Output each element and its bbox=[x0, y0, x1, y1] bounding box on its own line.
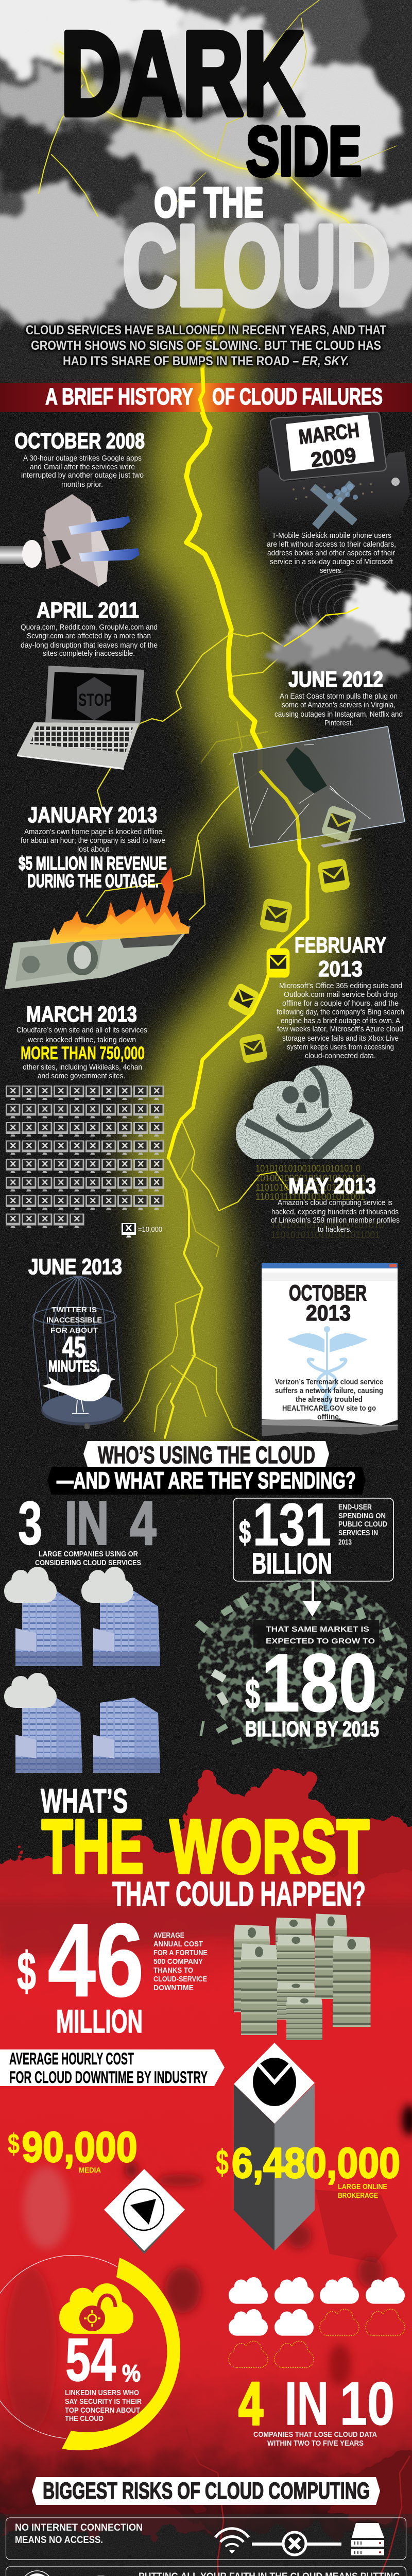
SIDE: SIDE bbox=[246, 112, 362, 190]
number: $ bbox=[239, 1515, 251, 1550]
stat: $90,000 media: $ bbox=[8, 2128, 20, 2160]
icon: unplugged plug bbox=[0, 494, 140, 587]
icon: cracked tablet bbox=[233, 726, 405, 848]
icon: cloud with open lock bbox=[59, 2283, 133, 2334]
caption box bbox=[253, 1620, 379, 1648]
money swirl bbox=[195, 1579, 409, 1749]
number: IN bbox=[65, 1489, 109, 1557]
description: T-Mobile Sidekick mobile phone users bbox=[272, 531, 391, 540]
caption: COMPANIES THAT LOSE CLOUD DATA bbox=[253, 2430, 377, 2439]
date: JUNE 2012 bbox=[288, 667, 383, 692]
intro paragraph: HAD ITS SHARE OF BUMPS IN THE ROAD – ER, SKY. bbox=[63, 354, 349, 368]
heading: what's the worst that could happen bbox=[41, 1782, 369, 1913]
date: JANUARY 2013 bbox=[28, 803, 157, 827]
label on phone screen bbox=[286, 415, 374, 473]
stat: 4 in 10 bbox=[238, 2370, 394, 2448]
description: for about an hour; the company is said to have bbox=[21, 836, 165, 845]
description continued: and some government sites. bbox=[38, 1072, 125, 1080]
main lightning bolt bbox=[165, 310, 308, 1438]
dark lower backdrop bbox=[0, 2514, 412, 2576]
description: address books and other aspects of their bbox=[267, 549, 395, 557]
description bbox=[277, 981, 404, 1060]
cage text bbox=[46, 1306, 102, 1375]
date: OCTOBER 2008 bbox=[14, 429, 145, 453]
storm sky photo bbox=[0, 0, 412, 402]
timeline: October 2013 browser bbox=[262, 1263, 398, 1436]
stat: $6,480,000 large online brokerage: LARGE ONLINE bbox=[338, 2182, 387, 2191]
number: $ bbox=[245, 1671, 260, 1718]
date: 2013 bbox=[306, 1301, 351, 1326]
heading: who's using the cloud bbox=[47, 1441, 366, 1495]
icon: bird bbox=[42, 1374, 115, 1414]
caption: TOP CONCERN ABOUT bbox=[65, 2406, 140, 2415]
yellow arc bbox=[62, 2258, 180, 2450]
pictogram: 4 in 10 clouds bbox=[229, 2277, 405, 2368]
date: JUNE 2013 bbox=[28, 1255, 122, 1279]
description: and Gmail after the services were bbox=[30, 463, 135, 471]
red stain shading bbox=[0, 1901, 412, 2432]
description bbox=[16, 1026, 147, 1044]
description: Amazon’s own home page is knocked offline bbox=[24, 827, 162, 836]
description: Microsoft’s Office 365 editing suite and bbox=[279, 981, 402, 990]
percentage: % bbox=[122, 2360, 141, 2386]
number: BILLION bbox=[252, 1547, 332, 1580]
description: Outlook.com mail service both drop bbox=[284, 990, 398, 999]
description: to hackers. bbox=[318, 1225, 352, 1234]
caption bbox=[65, 2388, 142, 2423]
description continued: other sites, including Wikileaks, 4chan bbox=[23, 1063, 142, 1072]
description continued bbox=[23, 1063, 142, 1080]
red stain background bbox=[0, 1767, 412, 2535]
risk 2: cost bbox=[6, 2567, 406, 2576]
timeline: June 2013 bbox=[28, 1255, 124, 1429]
caption bbox=[253, 2430, 377, 2448]
description: causing outages in Instagram, Netflix and bbox=[274, 710, 403, 719]
intro paragraph bbox=[26, 323, 386, 368]
stat: 4 in 10: IN bbox=[285, 2370, 329, 2438]
percentage: 54 bbox=[65, 2326, 116, 2394]
legend: one monitor equals 10,000 bbox=[122, 1223, 162, 1238]
description: cloud-connected data. bbox=[305, 1052, 376, 1060]
text: NO INTERNET CONNECTION bbox=[15, 2522, 143, 2533]
binary digits: 1101010010100100101010 bbox=[271, 1220, 384, 1230]
description: interrupted by another outage just two bbox=[21, 471, 144, 480]
timeline: envelope icons along bolt bbox=[227, 805, 357, 1064]
stat: $6,480,000 large online brokerage: BROKERAGE bbox=[338, 2191, 378, 2200]
number: 3 bbox=[18, 1489, 42, 1557]
binary digits: 11010111110101001011001 bbox=[255, 1192, 365, 1202]
description: the already troubled bbox=[296, 1395, 363, 1404]
icon: laptop with stop sign bbox=[17, 666, 144, 770]
caption: ANNUAL COST bbox=[153, 1940, 203, 1948]
icon: caduceus bbox=[288, 1326, 367, 1411]
caption: THE CLOUD bbox=[65, 2414, 104, 2423]
revenue callout bbox=[19, 853, 167, 891]
description bbox=[267, 531, 396, 575]
description: lost about bbox=[77, 845, 110, 854]
icon: stacks of money bbox=[234, 1913, 371, 2040]
top lightning bolts bbox=[39, 0, 397, 252]
binary digits: 1101010110101001011001 bbox=[271, 1230, 380, 1240]
lightning branches bbox=[87, 607, 358, 1442]
number: 4 bbox=[130, 1489, 156, 1557]
caption: DOWNTIME bbox=[153, 1984, 194, 1992]
description bbox=[21, 623, 158, 658]
binary digits: 11010101001010101010101 bbox=[255, 1182, 365, 1193]
caption: THANKS TO bbox=[153, 1966, 193, 1975]
description: are left without access to their calendars, bbox=[267, 540, 396, 549]
description: storage service fails and its Xbox Live bbox=[282, 1034, 399, 1043]
caption: SPENDING ON bbox=[338, 1512, 386, 1520]
line one: WHAT’S bbox=[41, 1782, 128, 1820]
timeline: January 2013 bbox=[5, 803, 191, 989]
number bbox=[18, 1489, 156, 1557]
description: some of Amazon’s servers in Virginia, bbox=[282, 701, 396, 709]
caption bbox=[153, 1931, 208, 1992]
description: A 30-hour outage strikes Google apps bbox=[23, 454, 142, 463]
DARK: DARK bbox=[61, 7, 304, 140]
caption: 2013 bbox=[338, 1538, 352, 1547]
caption bbox=[35, 1550, 141, 1567]
stat: 4 in 10: 10 bbox=[340, 2370, 394, 2438]
rounded frame bbox=[233, 1498, 393, 1581]
stat: $180 billion bbox=[245, 1620, 379, 1741]
description bbox=[274, 692, 403, 727]
number bbox=[239, 1491, 332, 1580]
number: 180 bbox=[262, 1636, 377, 1729]
number: MILLION bbox=[56, 2004, 143, 2040]
description: Quora.com, Reddit.com, GroupMe.com and bbox=[21, 623, 158, 632]
description: Verizon’s Terremark cloud service bbox=[275, 1378, 383, 1386]
description: sites completely inaccessible. bbox=[43, 649, 135, 658]
line two: THE bbox=[42, 1804, 144, 1889]
number: 131 bbox=[253, 1491, 331, 1558]
date: MAY 2013 bbox=[288, 1174, 376, 1198]
heading: average hourly cost arrow banner bbox=[0, 2049, 225, 2087]
stat: $46 million bbox=[17, 1902, 371, 2040]
description: An East Coast storm pulls the plug on bbox=[280, 692, 398, 701]
caption box: THAT SAME MARKET IS bbox=[266, 1625, 369, 1634]
OF THE: OF THE bbox=[154, 179, 264, 226]
number: $ bbox=[17, 1941, 36, 2002]
description: few weeks later, Microsoft’s Azure cloud bbox=[277, 1025, 403, 1033]
revenue callout: DURING THE OUTAGE. bbox=[27, 870, 159, 891]
binary digits bbox=[255, 1163, 384, 1240]
date: OCTOBER bbox=[289, 1281, 367, 1306]
description: day-long disruption that leaves many of the bbox=[21, 641, 158, 650]
description bbox=[271, 1198, 400, 1234]
description: Pinterest. bbox=[324, 719, 353, 727]
timeline: March 2013 bbox=[6, 1002, 165, 1238]
timeline: April 2011 bbox=[17, 598, 158, 770]
icon: broken connection bbox=[252, 2532, 341, 2555]
stat: 4 in 10: 4 bbox=[238, 2370, 263, 2438]
text bbox=[15, 2522, 143, 2546]
description: Cloudfare’s own site and all of its services bbox=[16, 1026, 147, 1035]
donut chart: 54 percent bbox=[0, 2256, 180, 2450]
icon: storm cloud and fingerprint bbox=[270, 571, 412, 683]
map pin: media play button bbox=[104, 2169, 185, 2254]
caption: FOR A FORTUNE bbox=[153, 1948, 208, 1957]
white ribbon: WHO’S USING THE CLOUD bbox=[98, 1442, 315, 1468]
line two bbox=[42, 1804, 369, 1889]
description: offline for a couple of hours, and the bbox=[282, 999, 399, 1008]
icon: bird cage bbox=[33, 1276, 124, 1429]
icon: laptop with stop sign: STOP bbox=[78, 690, 112, 710]
cage text: FOR ABOUT bbox=[50, 1326, 98, 1335]
stat: 3 in 4 bbox=[4, 1489, 160, 1773]
title: DARK SIDE OF THE CLOUD bbox=[61, 7, 390, 329]
description: Scvngr.com are affected by a more than bbox=[27, 632, 151, 640]
description: system keeps users from accessing bbox=[287, 1043, 394, 1052]
date bbox=[295, 933, 386, 981]
description: suffers a network failure, causing bbox=[275, 1386, 383, 1395]
caption: CONSIDERING CLOUD SERVICES bbox=[35, 1558, 141, 1567]
number: 46 bbox=[47, 1902, 144, 2019]
caption: WITHIN TWO TO FIVE YEARS bbox=[267, 2439, 364, 2448]
section heading: brief history banner bbox=[0, 368, 412, 412]
description: were knocked offline, taking down bbox=[27, 1036, 136, 1044]
yellow callout: MORE THAN 750,000 bbox=[21, 1043, 145, 1063]
caption: 500 COMPANY bbox=[153, 1957, 203, 1966]
icon: wifi bbox=[215, 2529, 249, 2554]
caption bbox=[338, 1503, 387, 1547]
stat: $131 billion box bbox=[233, 1491, 393, 1581]
thin circle bbox=[0, 2256, 117, 2438]
timeline: February 2013 bbox=[277, 933, 404, 1060]
number bbox=[17, 1902, 144, 2040]
caption: PUBLIC CLOUD bbox=[338, 1520, 387, 1529]
caption: SAY SECURITY IS THEIR bbox=[65, 2397, 142, 2406]
label on phone screen: MARCH bbox=[298, 419, 360, 449]
banner text left: A BRIEF HISTORY bbox=[45, 383, 193, 410]
description bbox=[275, 1378, 383, 1421]
legend: one monitor equals 10,000: =10,000 bbox=[138, 1225, 162, 1234]
timeline: March 2009 bbox=[259, 412, 410, 575]
description: Amazon’s cloud computing service is bbox=[278, 1198, 392, 1207]
number bbox=[245, 1636, 379, 1741]
description: service in a six-day outage of Microsoft bbox=[270, 557, 393, 566]
timeline: October 2008 bbox=[0, 429, 145, 587]
description: hacked, exposing hundreds of thousands bbox=[271, 1208, 399, 1216]
icon: coins bbox=[21, 2571, 137, 2576]
description: HEALTHCARE.GOV site to go bbox=[282, 1404, 376, 1413]
cage text: 45 bbox=[62, 1331, 86, 1364]
date: 2013 bbox=[318, 957, 363, 981]
icon: T-Mobile Sidekick phone bbox=[259, 412, 410, 527]
cage text: MINUTES. bbox=[48, 1357, 100, 1375]
panel bbox=[6, 2518, 406, 2560]
timeline: May 2013 bbox=[236, 1065, 400, 1240]
stat: $6,480,000 large online brokerage bbox=[216, 2139, 400, 2200]
caption: CLOUD-SERVICE bbox=[153, 1975, 207, 1984]
caption: LARGE COMPANIES USING OR bbox=[39, 1550, 138, 1558]
heading: average hourly cost arrow banner: FOR CLOUD DOWNTIME BY INDUSTRY bbox=[9, 2068, 208, 2087]
caption box: EXPECTED TO GROW TO bbox=[266, 1637, 375, 1646]
icon: burning dollar bill bbox=[5, 867, 191, 989]
stat: $6,480,000 large online brokerage: $ bbox=[216, 2143, 229, 2182]
label on phone screen: 2009 bbox=[310, 444, 357, 471]
cage text: INACCESSIBLE bbox=[46, 1316, 102, 1325]
arrow down to next stat bbox=[303, 1581, 321, 1617]
binary digits: 10100100001001010101110 bbox=[255, 1173, 365, 1183]
description bbox=[21, 454, 144, 489]
map pin: large online brokerage clock bbox=[234, 2043, 315, 2251]
date: APRIL 2011 bbox=[37, 598, 139, 623]
description bbox=[21, 827, 165, 854]
description: months prior. bbox=[61, 480, 103, 489]
browser window bbox=[262, 1263, 398, 1436]
pictogram: buildings with clouds bbox=[4, 1567, 160, 1773]
heading: average hourly cost arrow banner: AVERAGE HOURLY COST bbox=[9, 2049, 134, 2068]
stat: $90,000 media: 90,000 bbox=[22, 2123, 137, 2171]
caption: END-USER bbox=[338, 1503, 372, 1512]
red lightning behind risks bbox=[10, 2428, 410, 2576]
icon: skull cloud bbox=[236, 1065, 374, 1159]
description: of LinkedIn’s 259 million member profiles bbox=[271, 1216, 400, 1225]
description: servers. bbox=[320, 566, 343, 575]
date: MARCH 2013 bbox=[26, 1002, 137, 1027]
date bbox=[289, 1281, 367, 1326]
description: offline. bbox=[317, 1413, 341, 1421]
stat: $90,000 media: MEDIA bbox=[79, 2166, 101, 2175]
caption: SERVICES IN bbox=[338, 1529, 378, 1537]
cage text: TWITTER IS bbox=[52, 1306, 97, 1314]
description: engine has a brief outage of its own. A bbox=[281, 1016, 400, 1025]
pictogram: 75 monitors bbox=[6, 1086, 165, 1232]
text: MEANS NO ACCESS. bbox=[15, 2535, 103, 2546]
revenue callout: $5 MILLION IN REVENUE bbox=[19, 853, 167, 874]
icon: server bbox=[351, 2523, 384, 2555]
lightning glow behind timeline bbox=[168, 289, 307, 1422]
panel bbox=[6, 2567, 406, 2576]
risk 1: no internet connection bbox=[6, 2518, 406, 2560]
caption: AVERAGE bbox=[153, 1931, 184, 1940]
caption: LINKEDIN USERS WHO bbox=[65, 2388, 139, 2397]
binary digits: 101010101001001010101 0 bbox=[255, 1163, 360, 1174]
timeline: June 2012 bbox=[270, 571, 412, 727]
